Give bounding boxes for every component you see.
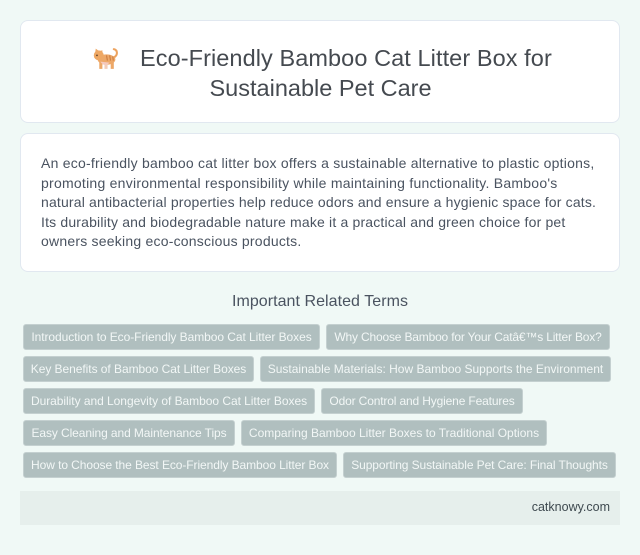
- heading: [140, 45, 552, 101]
- panel: title card: [20, 20, 620, 123]
- text block: description: promoting environmental responsibility while maintaining functionality. Bamboo's: [41, 174, 558, 190]
- tag: [23, 356, 254, 382]
- heading: related terms: Important Related Terms: [232, 293, 408, 310]
- tag: [343, 452, 616, 478]
- tag: [23, 388, 315, 414]
- tag: Comparing Bamboo Litter Boxes to Traditional Options: [249, 426, 539, 440]
- tag: [326, 324, 610, 350]
- tag: Odor Control and Hygiene Features: [329, 394, 515, 408]
- text block: description: [41, 155, 596, 249]
- tag: [260, 356, 611, 382]
- heading: Sustainable Pet Care: [210, 75, 432, 101]
- tag: Key Benefits of Bamboo Cat Litter Boxes: [31, 362, 246, 376]
- tag: [23, 452, 337, 478]
- tag: [321, 388, 523, 414]
- tag: Supporting Sustainable Pet Care: Final Thoughts: [351, 458, 608, 472]
- icon: cat: [94, 48, 118, 69]
- tag: [23, 420, 235, 446]
- tag: Durability and Longevity of Bamboo Cat Litter Boxes: [31, 394, 307, 408]
- tag: Why Choose Bamboo for Your Catâ€™s Litter Box?: [334, 330, 602, 344]
- tag: [241, 420, 547, 446]
- tag: How to Choose the Best Eco-Friendly Bamboo Litter Box: [31, 458, 329, 472]
- tag group: related terms: [23, 324, 616, 478]
- text block: description: Its durability and biodegradable nature make it a practical and green choice for pet: [41, 214, 565, 230]
- text block: description: owners seeking eco-conscious products.: [41, 233, 302, 249]
- tag: Introduction to Eco-Friendly Bamboo Cat Litter Boxes: [31, 330, 312, 344]
- heading: Eco-Friendly Bamboo Cat Litter Box for: [140, 45, 552, 71]
- text block: description: natural antibacterial properties help reduce odors and ensure a hygienic space for cats.: [41, 194, 596, 210]
- tag: Easy Cleaning and Maintenance Tips: [31, 426, 227, 440]
- panel: description card: [20, 133, 620, 272]
- footer bar: [20, 491, 620, 525]
- tag: Sustainable Materials: How Bamboo Supports the Environment: [268, 362, 603, 376]
- footer text: catknowy.com: [532, 500, 610, 514]
- text block: description: An eco-friendly bamboo cat litter box offers a sustainable alternative to plastic options,: [41, 155, 595, 171]
- tag: [23, 324, 320, 350]
